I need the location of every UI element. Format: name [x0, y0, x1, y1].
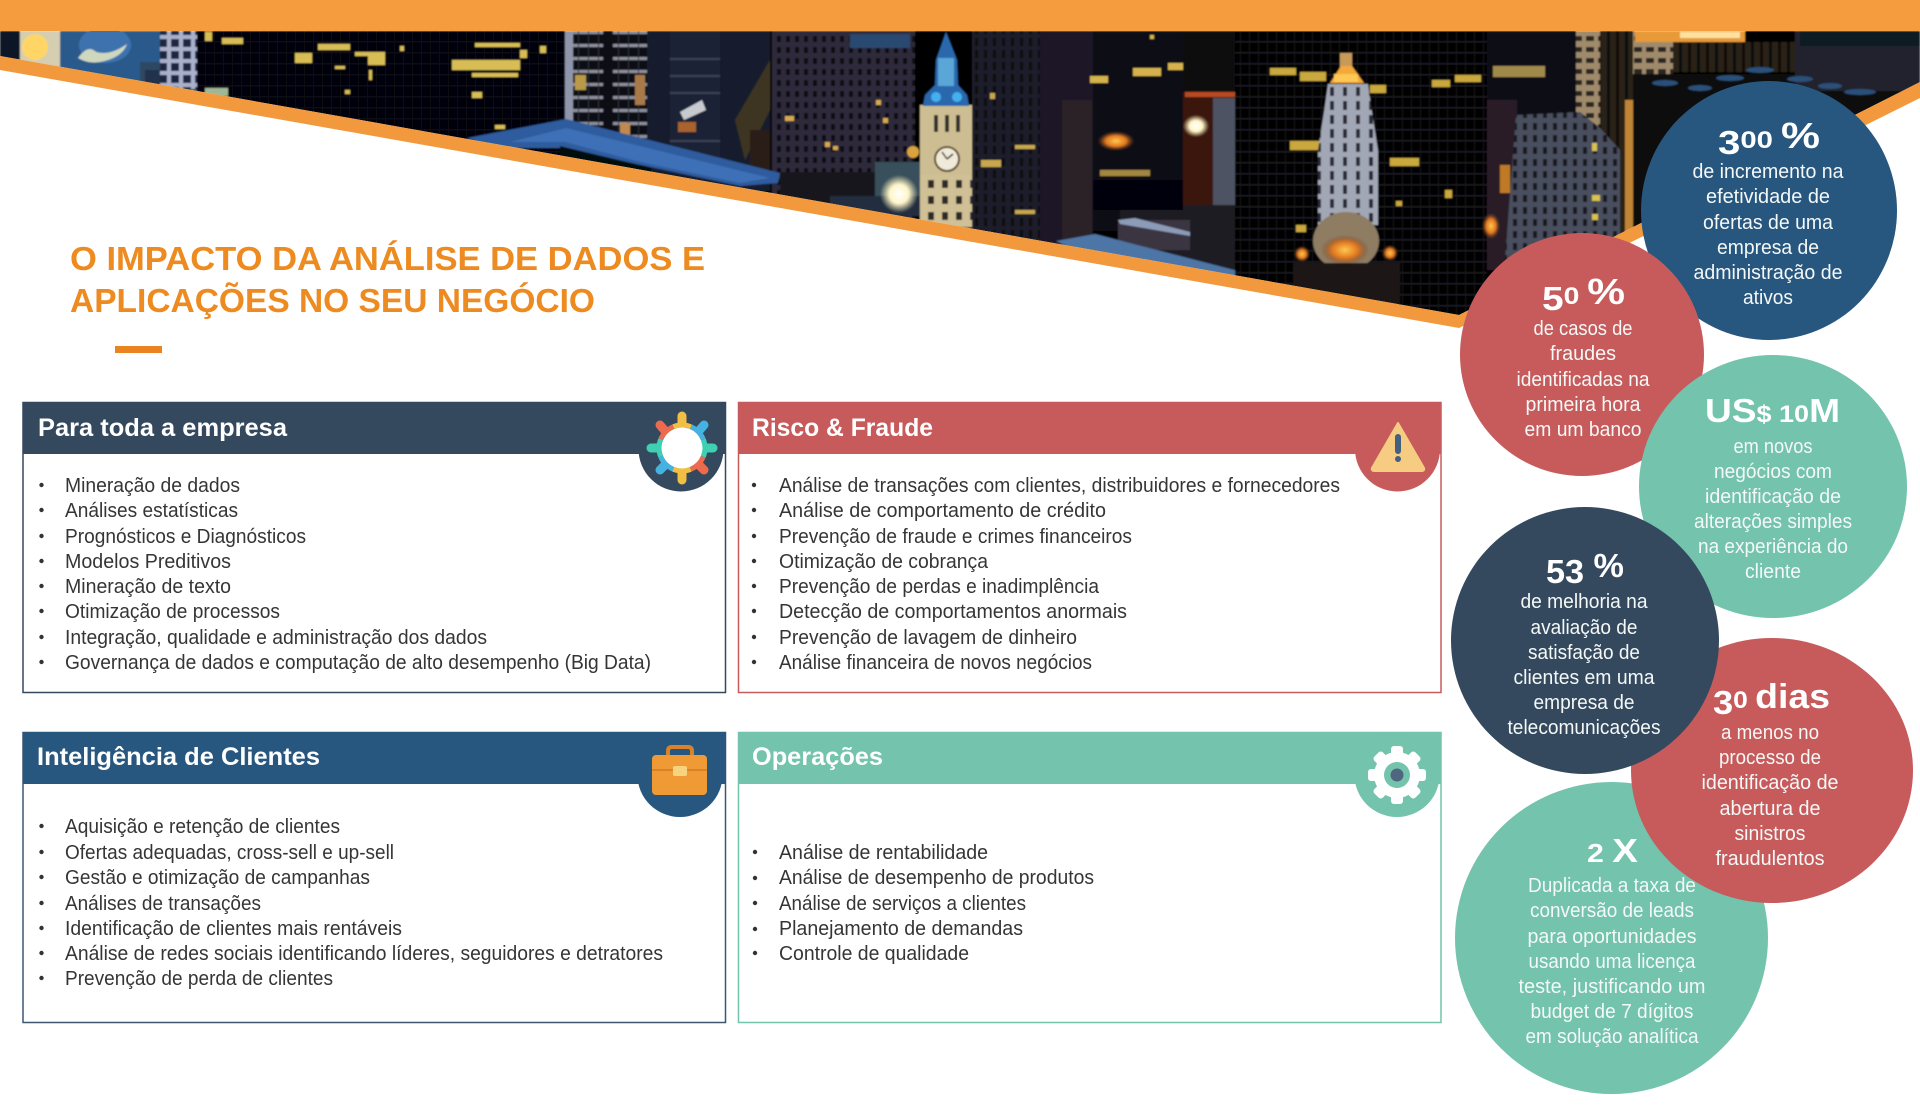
stat: 53 %: avaliação de [1530, 617, 1638, 639]
list: Operações [753, 842, 1094, 965]
stat: US$ 10M: alterações simples [1694, 511, 1852, 533]
stat: US$ 10M [1694, 392, 1852, 583]
list: Inteligência de Clientes: Análises de transações [65, 893, 261, 915]
circle: green 2X [1455, 782, 1768, 1094]
photo: glass towers [565, 31, 770, 191]
stat: 300 %: administração de [1694, 262, 1842, 284]
panel header: Inteligência de Clientes [23, 732, 726, 784]
stat: US$ 10M: negócios com [1714, 461, 1832, 483]
list: Para toda a empresa: Integração, qualidade e administração dos dados [65, 627, 487, 649]
list: Inteligência de Clientes: Identificação de clientes mais rentáveis [65, 918, 402, 940]
stat: 30 dias [1702, 678, 1838, 870]
list: Risco & Fraude: Prevenção de perdas e inadimplência [779, 576, 1100, 598]
stat: 30 dias: fraudulentos [1716, 848, 1824, 870]
icon: connected people ring [638, 406, 724, 492]
stat: 300 %: empresa de [1717, 237, 1819, 259]
list: Risco & Fraude: Análise financeira de novos negócios [779, 652, 1092, 674]
stat: 53 %: telecomunicações [1508, 717, 1660, 739]
stat: 2 X: Duplicada a taxa de [1528, 875, 1696, 897]
stat: 2 X: conversão de leads [1530, 900, 1694, 922]
stat: 53 %: 53 [1546, 553, 1583, 590]
stat: 30 dias: 0 [1733, 687, 1755, 714]
icon: briefcase [638, 733, 722, 817]
stat: 53 %: clientes em uma [1514, 667, 1655, 689]
stat: 30 dias: abertura de [1720, 798, 1820, 820]
list: Risco & Fraude: Otimização de cobrança [779, 551, 989, 573]
list: Risco & Fraude: Análise de comportamento de crédito [779, 500, 1106, 522]
stat: US$ 10M: identificação de [1705, 486, 1841, 508]
stat: 2 X: 2 X [1587, 832, 1638, 869]
list: Risco & Fraude: Detecção de comportamentos anormais [779, 601, 1127, 623]
stat: 30 dias: identificação de [1702, 772, 1838, 794]
panel: Para toda a empresa [23, 402, 726, 692]
stat: 2 X: para oportunidades [1528, 926, 1696, 948]
stat: 2 X: em solução analítica [1526, 1026, 1699, 1048]
circle: navy 53% [1451, 507, 1719, 774]
panel: Risco & Fraude [738, 402, 1441, 692]
stat: US$ 10M: cliente [1745, 561, 1801, 583]
stat: 50 %: % [1587, 271, 1625, 312]
stat: 53 %: satisfação de [1528, 642, 1640, 664]
panel header: Operações [738, 732, 1441, 784]
list: Para toda a empresa [39, 475, 651, 674]
stat: US$ 10M: US$ 10M [1705, 392, 1840, 429]
icon: warning triangle [1355, 406, 1440, 492]
stat: 53 % [1508, 547, 1660, 739]
list: Risco & Fraude [752, 475, 1340, 674]
stat: 53 %: empresa de [1534, 692, 1634, 714]
stat: 300 %: 00 [1740, 127, 1781, 154]
photo: ornate tower [1293, 53, 1400, 313]
stat: 2 X: budget de 7 dígitos [1530, 1001, 1694, 1023]
panel header: Risco & Fraude [738, 402, 1441, 454]
title: O IMPACTO DA ANÁLISE DE DADOS E [70, 240, 705, 277]
list: Operações: Análise de rentabilidade [779, 842, 988, 864]
stat: 30 dias: dias [1755, 678, 1830, 716]
list: Operações: Planejamento de demandas [779, 918, 1023, 940]
title [70, 240, 705, 319]
list: Para toda a empresa: Mineração de texto [65, 576, 231, 598]
list: Para toda a empresa: Otimização de processos [65, 601, 280, 623]
stat: 30 dias: processo de [1719, 747, 1821, 769]
stat: 50 % [1516, 271, 1650, 441]
stat: 2 X: teste, justificando um [1518, 976, 1706, 998]
stat: 300 % [1692, 115, 1844, 309]
list: Operações: Análise de serviços a clientes [779, 893, 1026, 915]
stat: 50 %: de casos de [1534, 318, 1632, 340]
list: Risco & Fraude: Análise de transações com clientes, distribuidores e fornecedores [779, 475, 1340, 497]
title accent bar [115, 346, 162, 353]
orange diagonal band [0, 56, 1920, 328]
stat: 50 %: 5 [1542, 280, 1564, 317]
stat: 50 %: primeira hora [1526, 394, 1641, 416]
list: Para toda a empresa: Governança de dados e computação de alto desempenho (Big Data) [65, 652, 651, 674]
list: Risco & Fraude: Prevenção de fraude e crimes financeiros [779, 526, 1132, 548]
circle: green US$ [1639, 355, 1907, 618]
stat: 30 dias: sinistros [1734, 823, 1806, 845]
circle: red 30 dias [1631, 638, 1913, 903]
stat: 50 %: 0 [1564, 283, 1587, 310]
stat: 50 %: identificadas na [1516, 369, 1650, 391]
list: Para toda a empresa: Mineração de dados [65, 475, 240, 497]
title: APLICAÇÕES NO SEU NEGÓCIO [70, 282, 595, 319]
heading: Inteligência de Clientes: Inteligência de Clientes [37, 743, 320, 771]
list: Para toda a empresa: Modelos Preditivos [65, 551, 231, 573]
heading: Risco & Fraude: Risco & Fraude [752, 414, 933, 442]
circle: blue [1641, 81, 1897, 340]
list: Inteligência de Clientes: Ofertas adequadas, cross-sell e up-sell [65, 842, 394, 864]
panel header: Para toda a empresa [23, 402, 726, 454]
icon: gear [1354, 733, 1440, 817]
stat: 300 %: 3 [1718, 124, 1740, 161]
circle: red 50% [1460, 233, 1704, 476]
orange top bar [0, 0, 1920, 31]
list: Risco & Fraude: Prevenção de lavagem de dinheiro [779, 627, 1077, 649]
list: Para toda a empresa: Prognósticos e Diagnósticos [65, 526, 306, 548]
list: Para toda a empresa: Análises estatísticas [65, 500, 238, 522]
stat: 53 %: % [1594, 547, 1624, 584]
photo: night city skyline [0, 27, 1920, 331]
heading: Para toda a empresa: Para toda a empresa [38, 414, 288, 442]
stat: 300 %: efetividade de [1706, 186, 1830, 208]
panel: Operações [738, 732, 1441, 1022]
stat: 30 dias: 3 [1713, 684, 1733, 721]
stat: 300 %: % [1781, 115, 1820, 156]
stat: 50 %: em um banco [1524, 419, 1642, 441]
stat: US$ 10M: em novos [1734, 436, 1812, 458]
list: Inteligência de Clientes: Prevenção de perda de clientes [65, 968, 333, 990]
stat: 300 %: ofertas de uma [1703, 212, 1834, 234]
panel: Inteligência de Clientes [23, 732, 726, 1022]
list: Inteligência de Clientes: Gestão e otimização de campanhas [65, 867, 370, 889]
stat: 53 %: de melhoria na [1520, 591, 1648, 613]
stat: 300 %: ativos [1743, 287, 1793, 309]
list: Inteligência de Clientes [39, 816, 663, 990]
stat: 2 X [1518, 832, 1706, 1048]
heading: Operações: Operações [752, 743, 883, 771]
stat: 2 X: usando uma licença [1528, 951, 1696, 973]
photo: clock tower [907, 32, 972, 227]
list: Inteligência de Clientes: Aquisição e retenção de clientes [65, 816, 340, 838]
list: Inteligência de Clientes: Análise de redes sociais identificando líderes, seguidores e detratores [65, 943, 663, 965]
stat: 30 dias: a menos no [1721, 722, 1819, 744]
list: Operações: Análise de desempenho de produtos [779, 867, 1094, 889]
photo: blue roof [467, 119, 780, 186]
stat: US$ 10M: na experiência do [1698, 536, 1848, 558]
list: Operações: Controle de qualidade [779, 943, 969, 965]
stat: 300 %: de incremento na [1692, 161, 1844, 183]
stat: 50 %: fraudes [1550, 343, 1616, 365]
